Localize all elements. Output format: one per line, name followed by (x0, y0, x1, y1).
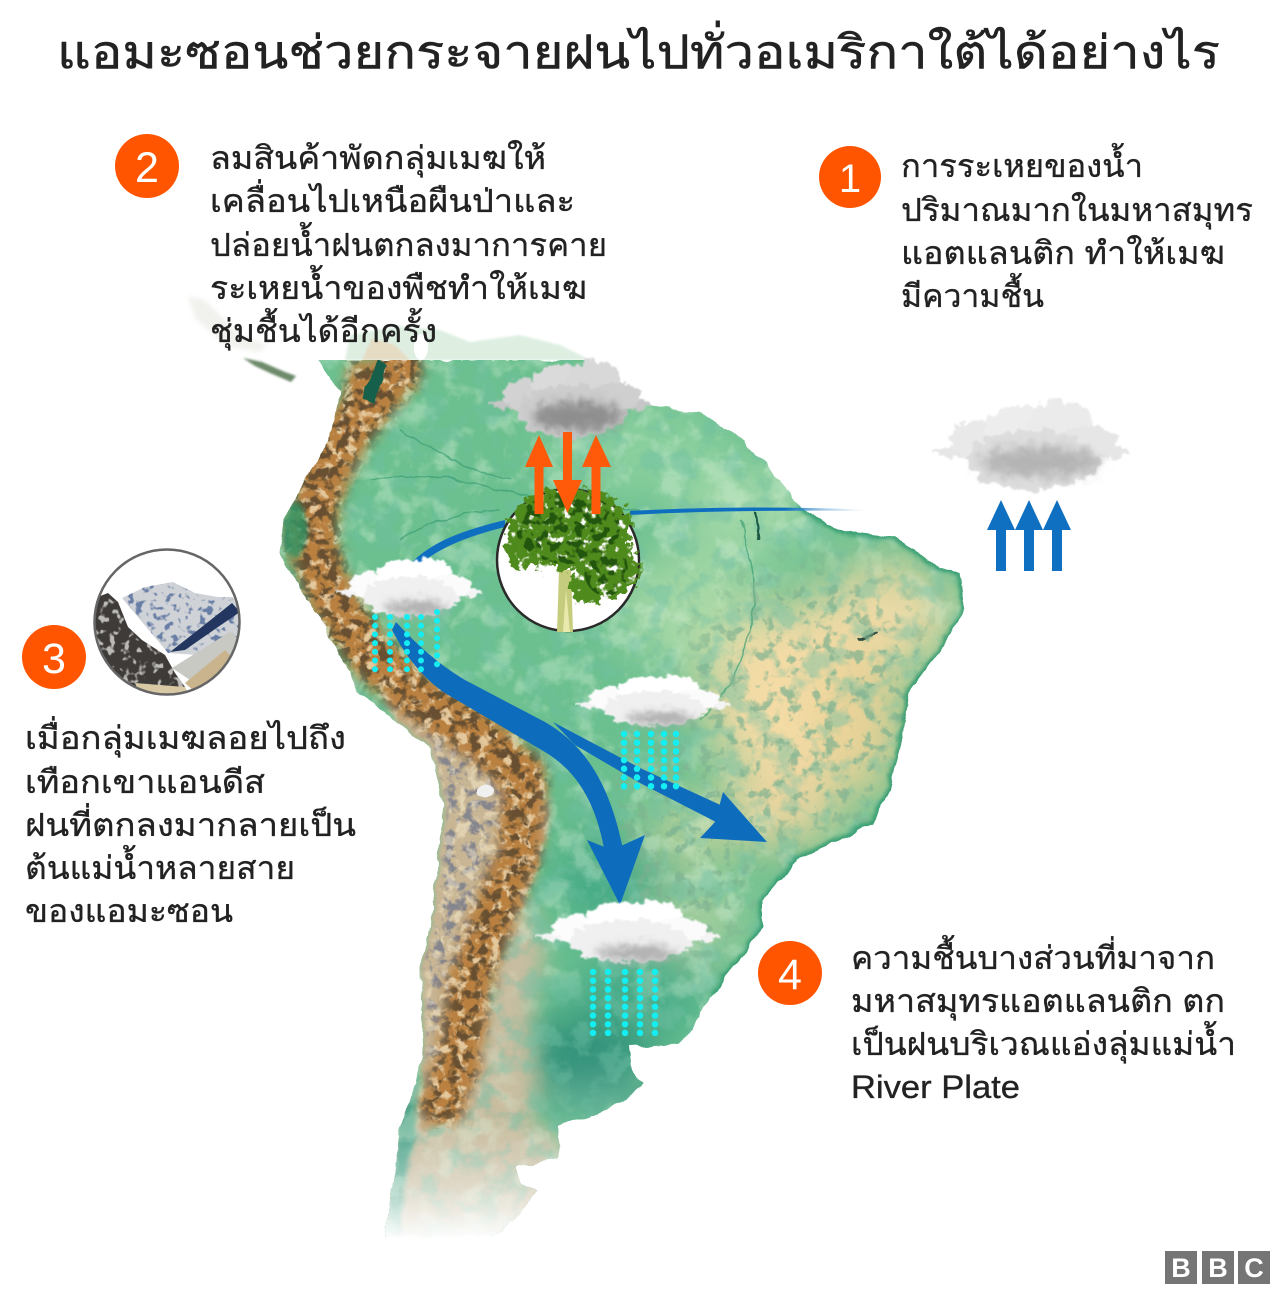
cloud: over the Amazon forest (490, 360, 651, 438)
step 1 badge (819, 146, 881, 208)
step 4 badge (758, 941, 822, 1005)
cloud: over the Atlantic (934, 400, 1130, 490)
cloud: central Brazil (577, 675, 731, 726)
land colour and relief (270, 350, 980, 1250)
arrows: evapotranspiration (525, 432, 611, 514)
icon: tree in circle (497, 486, 640, 632)
BBC logo: C (1244, 1253, 1264, 1283)
step 2 text: ระเหยน้ำของพืชทำให้เมฆ (210, 265, 587, 306)
rain: central Brazil (624, 734, 676, 793)
step 4 badge: 4 (778, 951, 802, 999)
icon: mountain photo (88, 545, 245, 700)
arrow: flow to south-east Brazil (553, 722, 767, 842)
title: แอมะซอนช่วยกระจายฝนไปทั่วอเมริกาใต้ได้อย่างไร (57, 20, 1220, 78)
cloud: over the Andes (337, 558, 483, 617)
faded northern map edge (188, 296, 590, 382)
map: South America relief map (188, 296, 980, 1250)
rain: over the Andes (375, 612, 437, 670)
BBC logo (1165, 1251, 1270, 1284)
arrow: moisture flow across the Amazon (412, 507, 868, 564)
step 3 badge: 3 (42, 635, 66, 683)
step 3 badge (22, 625, 86, 689)
step 3 text: เทือกเขาแอนดีส (25, 764, 265, 800)
step 4 text: มหาสมุทรแอตแลนติก ตก (851, 983, 1225, 1021)
step 2 text: เคลื่อนไปเหนือผืนป่าและ (210, 179, 575, 219)
step 4 text: River Plate (851, 1069, 1020, 1105)
southern fade (384, 1134, 560, 1239)
step 3 text (25, 716, 356, 929)
arrow: flow south to River Plate (392, 622, 645, 905)
Andes ridges (270, 350, 570, 1130)
western Patagonia and Andean foothills (370, 900, 560, 1240)
step 4 text: เป็นฝนบริเวณแอ่งลุ่มแม่น้ำ (851, 1021, 1236, 1064)
rain: River Plate basin (593, 972, 655, 1037)
cloud: River Plate basin (537, 900, 721, 962)
step 3 text: เมื่อกลุ่มเมฆลอยไปถึง (25, 716, 346, 758)
step 2 text: ลมสินค้าพัดกลุ่มเมฆให้ (210, 140, 546, 178)
rivers (370, 430, 754, 720)
arrows: evaporation from the ocean (987, 500, 1071, 571)
step 2 badge: 2 (135, 144, 159, 192)
step 2 badge (115, 134, 179, 198)
step 1 badge: 1 (839, 157, 861, 201)
step 1 text: แอตแลนติก ทำให้เมฆ (901, 235, 1225, 271)
step 1 text: การระเหยของน้ำ (901, 143, 1143, 184)
step 3 text: ต้นแม่น้ำหลายสาย (25, 845, 295, 886)
step 2 text: ชุ่มชื้นได้อีกครั้ง (210, 308, 437, 351)
step 1 text: มีความชื้น (901, 273, 1044, 314)
BBC logo: B (1208, 1253, 1228, 1283)
step 2 text: ปล่อยน้ำฝนตกลงมาการคาย (210, 222, 607, 263)
BBC logo: B (1171, 1253, 1191, 1283)
step 1 text: ปริมาณมากในมหาสมุทร (901, 192, 1253, 230)
step 4 text (851, 935, 1236, 1105)
coastal shading (713, 505, 965, 993)
step 2 text (210, 140, 607, 351)
central Andes highlands (380, 690, 548, 1130)
step 4 text: ความชื้นบางส่วนที่มาจาก (851, 935, 1215, 976)
step 3 text: ของแอมะซอน (25, 893, 233, 929)
step 1 text (901, 143, 1253, 314)
step 3 text: ฝนที่ตกลงมากลายเป็น (25, 803, 356, 843)
